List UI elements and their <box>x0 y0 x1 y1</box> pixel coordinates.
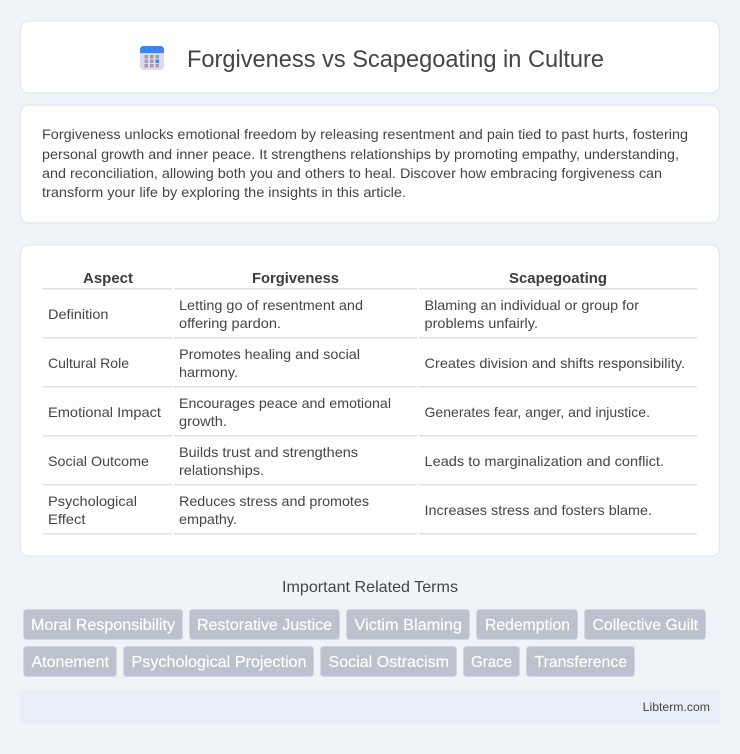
tag: Victim Blaming <box>346 610 470 640</box>
tag: Restorative Justice <box>190 610 340 640</box>
tag: Atonement: Atonement <box>32 654 110 671</box>
table row: Emotional Impact: growth. <box>179 413 227 429</box>
table row: Psychological Effect: Effect <box>48 511 86 527</box>
table row: Definition: Definition <box>48 306 108 322</box>
panel: title header <box>20 21 720 93</box>
table row: Social Outcome: relationships. <box>179 462 264 478</box>
table row: Cultural Role: Creates division and shifts responsibility. <box>424 355 685 371</box>
table row: Cultural Role: Promotes healing and social <box>179 346 360 362</box>
table row: Psychological Effect: empathy. <box>179 511 237 527</box>
table row: Definition: Letting go of resentment and <box>179 297 363 313</box>
table header row: Scapegoating <box>509 270 607 287</box>
table row: Social Outcome: Builds trust and strengthens <box>179 444 358 460</box>
text block: introduction paragraph <box>42 126 688 200</box>
table row: Definition: problems unfairly. <box>424 315 538 331</box>
panel: related term tags <box>24 610 706 676</box>
tag: Social Ostracism <box>320 646 456 676</box>
text block: introduction paragraph: transform your life by exploring the insights in this article. <box>42 184 406 200</box>
tag: Victim Blaming: Victim Blaming <box>354 617 462 634</box>
table row: Psychological Effect: Increases stress and fosters blame. <box>424 502 652 518</box>
table row: Social Outcome <box>48 444 664 478</box>
tag: Grace <box>464 646 520 676</box>
table header row: Forgiveness <box>252 270 339 287</box>
tag: Moral Responsibility <box>24 610 182 640</box>
table row: Psychological Effect: Reduces stress and promotes <box>179 493 369 509</box>
text block: introduction paragraph: and reconciliation, allowing both you and others to heal. Discover how embracing forgiveness can <box>42 165 662 181</box>
tag: Grace: Grace <box>471 654 512 671</box>
icon: calendar <box>140 46 164 70</box>
panel: introduction <box>20 105 720 223</box>
table row: Social Outcome: Leads to marginalization and conflict. <box>424 453 664 469</box>
text block: introduction paragraph: personal growth and inner peace. It strengthens relationships by promoting empathy, understanding, <box>42 146 679 162</box>
table row: Definition <box>48 297 639 331</box>
tag: Transference: Transference <box>534 654 627 671</box>
table row: Emotional Impact <box>48 395 650 429</box>
heading: Important Related Terms: Important Related Terms <box>282 579 458 596</box>
table row: Social Outcome: Social Outcome <box>48 453 149 469</box>
table header row <box>83 270 607 287</box>
table row: Definition: offering pardon. <box>179 315 281 331</box>
table row: Psychological Effect: Psychological <box>48 493 137 509</box>
title: Forgiveness vs Scapegoating in Culture <box>187 46 604 73</box>
tag: Redemption: Redemption <box>485 617 570 634</box>
table header row: Aspect <box>83 270 133 287</box>
table row: Cultural Role <box>48 346 685 380</box>
tag: Social Ostracism: Social Ostracism <box>328 654 449 671</box>
footer credit: Libterm.com <box>643 700 710 714</box>
table row: Definition: Blaming an individual or group for <box>424 297 639 313</box>
table row: Emotional Impact: Generates fear, anger, and injustice. <box>424 404 650 420</box>
table row: Psychological Effect <box>48 493 652 527</box>
panel: comparison table <box>20 245 720 556</box>
table row: Cultural Role: Cultural Role <box>48 355 129 371</box>
tag: Restorative Justice: Restorative Justice <box>197 617 332 634</box>
tag: Moral Responsibility: Moral Responsibility <box>31 617 175 634</box>
tag: Psychological Projection <box>124 646 314 676</box>
tag: Collective Guilt <box>584 610 706 640</box>
tag: Transference <box>526 646 634 676</box>
table row: Emotional Impact: Emotional Impact <box>48 404 161 420</box>
tag: Redemption <box>476 610 578 640</box>
text block: introduction paragraph: Forgiveness unlocks emotional freedom by releasing resentment and pain tied to past hurts, fostering <box>42 126 688 142</box>
table row: Cultural Role: harmony. <box>179 364 238 380</box>
tag: Collective Guilt: Collective Guilt <box>592 617 699 634</box>
table row: Emotional Impact: Encourages peace and emotional <box>179 395 391 411</box>
tag: Atonement <box>24 646 116 676</box>
footer <box>20 690 720 724</box>
tag: Psychological Projection: Psychological Projection <box>132 654 306 671</box>
